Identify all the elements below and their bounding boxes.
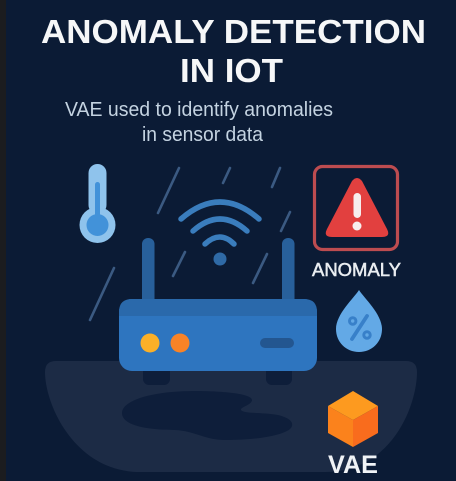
VAE label: VAE	[328, 451, 378, 479]
subtitle: VAE used to identify anomalies	[65, 99, 333, 121]
feet	[143, 365, 292, 385]
rain streaks	[90, 168, 290, 320]
icon: warning triangle	[326, 178, 388, 237]
ground shape	[45, 361, 417, 472]
alert box	[314, 166, 398, 250]
title: IN IOT	[180, 52, 283, 89]
title	[41, 13, 426, 89]
title: ANOMALY DETECTION	[41, 13, 426, 50]
anomaly label: ANOMALY	[312, 260, 401, 280]
status lights	[140, 334, 190, 352]
router body	[119, 299, 317, 371]
anomaly alert	[314, 166, 398, 250]
antennas	[142, 238, 294, 308]
icon: humidity drop	[336, 290, 382, 352]
icon: thermometer	[80, 164, 116, 243]
icon: VAE cube	[328, 391, 378, 447]
subtitle	[65, 99, 333, 146]
subtitle: in sensor data	[142, 124, 264, 146]
puddle	[122, 391, 292, 440]
slot	[260, 338, 294, 348]
icon: wifi signal	[181, 202, 259, 266]
router	[119, 238, 317, 385]
